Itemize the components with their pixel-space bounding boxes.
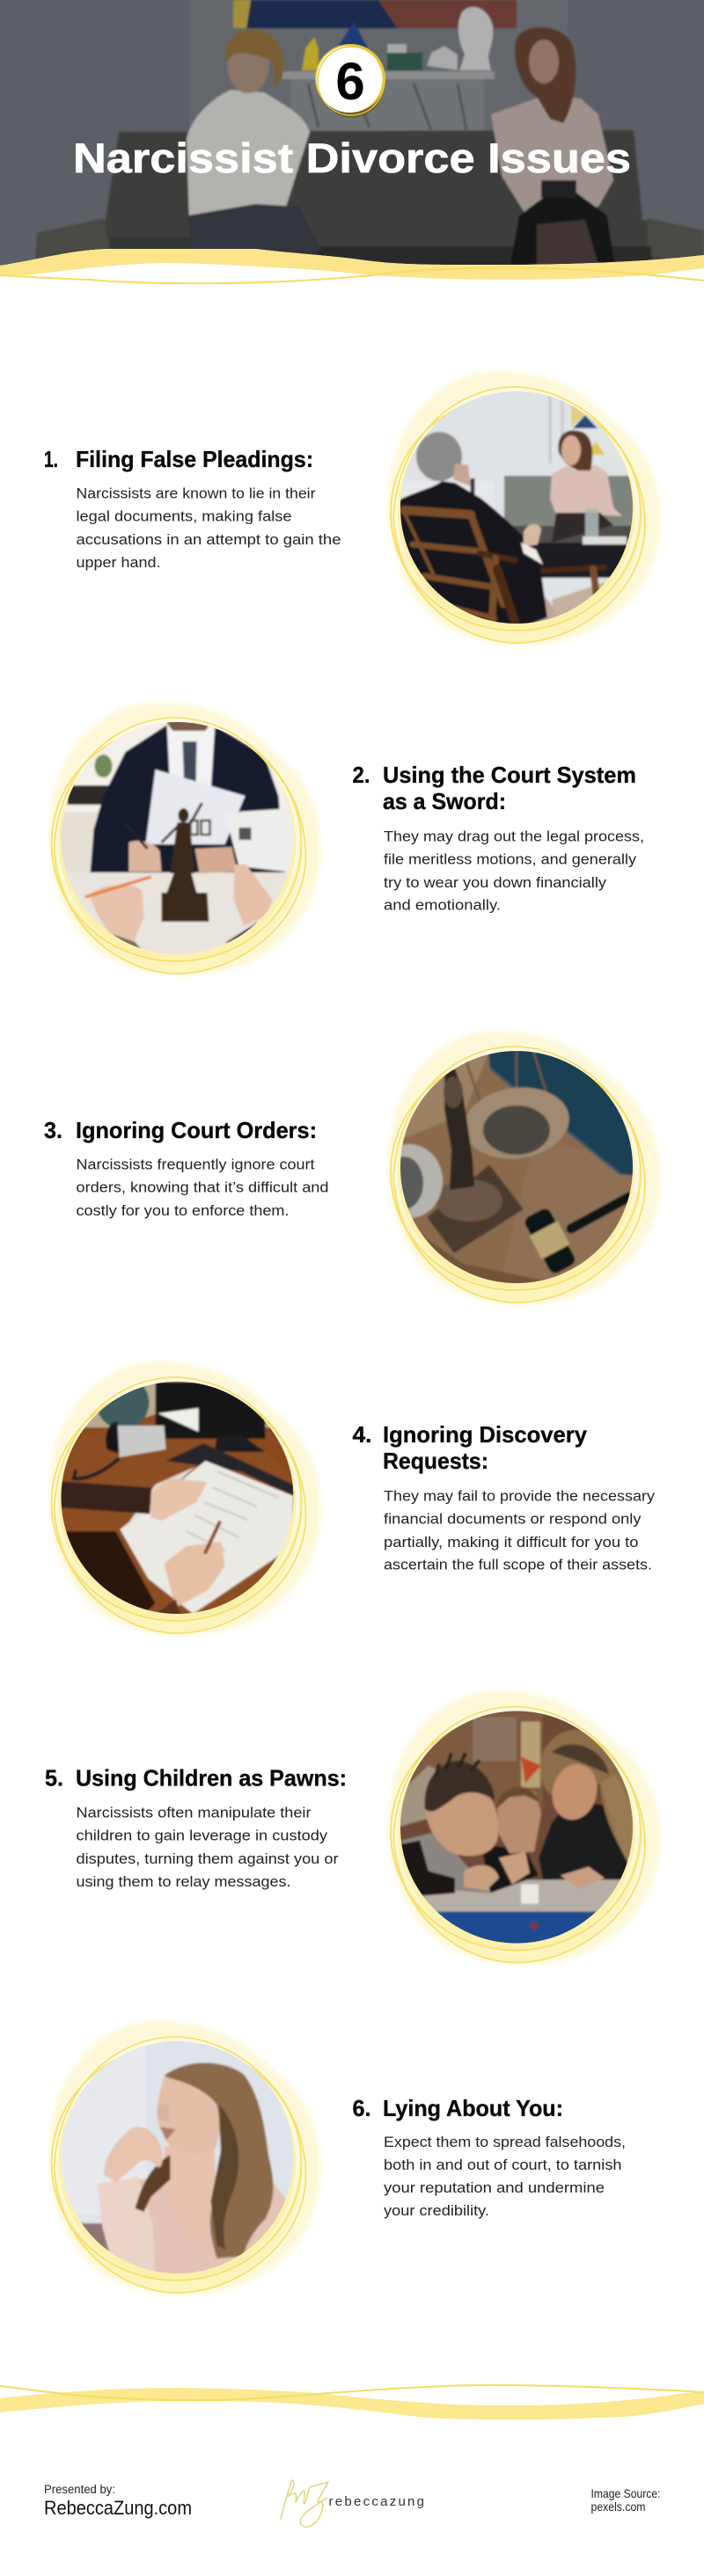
item 1 text: legal documents, making false [76, 508, 292, 525]
item 5 text: disputes, turning them against you or [76, 1850, 339, 1867]
item 6 text: your reputation and undermine [384, 2179, 605, 2196]
header wave [0, 249, 704, 290]
item 4 text: financial documents or respond only [384, 1511, 642, 1528]
item 3 text: Narcissists frequently ignore court [76, 1156, 315, 1173]
item 5 text: using them to relay messages. [76, 1873, 290, 1890]
item 6 text: both in and out of court, to tarnish [384, 2156, 621, 2173]
item 1 photo [388, 371, 660, 645]
footer logo [281, 2480, 424, 2527]
item 2 text: try to wear you down financially [384, 874, 607, 891]
item 2 text: and emotionally. [384, 897, 501, 913]
header photo banner [0, 0, 704, 286]
item 2 text: as a Sword: [383, 788, 506, 814]
item 4 text [352, 1421, 656, 1573]
woman [491, 95, 613, 218]
item 6 text: your credibility. [384, 2202, 489, 2219]
item 5 text: Narcissists often manipulate their [76, 1805, 312, 1821]
item 5 text: children to gain leverage in custody [76, 1828, 328, 1844]
item 1 text: Narcissists are known to lie in their [76, 485, 316, 501]
footer: presented by [44, 2482, 192, 2519]
number badge [315, 44, 385, 118]
title: Narcissist Divorce Issues [73, 135, 631, 181]
item 2 text: file meritless motions, and generally [384, 851, 637, 868]
footer: image source: Image Source: [591, 2486, 660, 2500]
item 4 text: Requests: [383, 1448, 488, 1474]
item 3 text: costly for you to enforce them. [76, 1202, 289, 1219]
item 5 photo [388, 1690, 660, 1965]
item 2 text: They may drag out the legal process, [384, 828, 644, 844]
item 4 text: ascertain the full scope of their assets. [384, 1557, 652, 1573]
item 1 text: upper hand. [76, 554, 160, 571]
item 6 photo [48, 2021, 321, 2295]
item 6 text: Lying About You: [383, 2095, 563, 2121]
sofa [35, 129, 665, 260]
item 2 text: 2. [352, 762, 370, 788]
item 4 text: They may fail to provide the necessary [384, 1488, 656, 1504]
item 5 text [45, 1764, 347, 1890]
footer: presented by: RebeccaZung.com [44, 2497, 192, 2519]
item 2 photo [48, 702, 321, 975]
item 6 text: 6. [352, 2095, 371, 2121]
item 1 text: Filing False Pleadings: [76, 446, 313, 472]
item 3 text: 3. [44, 1117, 62, 1143]
item 6 text: Expect them to spread falsehoods, [384, 2134, 626, 2150]
item 4 text: 4. [352, 1421, 371, 1448]
item 6 text [352, 2095, 626, 2219]
man [187, 90, 310, 220]
item 4 photo [48, 1361, 321, 1635]
item 3 photo [376, 1031, 660, 1304]
icon: signature monogram [281, 2480, 328, 2527]
item 1 text [44, 446, 341, 571]
item 2 text [352, 762, 644, 913]
item 5 text: Using Children as Pawns: [76, 1764, 347, 1791]
item 1 text: 1. [44, 446, 58, 472]
item 3 text [44, 1117, 329, 1219]
item 2 text: Using the Court System [383, 762, 636, 788]
item 4 text: partially, making it difficult for you to [384, 1534, 639, 1551]
footer: image source: pexels.com [591, 2499, 646, 2514]
footer: image source [591, 2486, 660, 2514]
number badge: 6 [335, 52, 365, 111]
footer wave [0, 2385, 704, 2419]
item 3 text: Ignoring Court Orders: [76, 1117, 317, 1143]
footer logo: rebeccazung [329, 2494, 424, 2509]
footer: presented by: Presented by: [44, 2482, 115, 2496]
item 3 text: orders, knowing that it’s difficult and [76, 1179, 329, 1196]
item 5 text: 5. [45, 1764, 63, 1791]
item 1 text: accusations in an attempt to gain the [76, 531, 341, 548]
item 4 text: Ignoring Discovery [383, 1421, 588, 1448]
